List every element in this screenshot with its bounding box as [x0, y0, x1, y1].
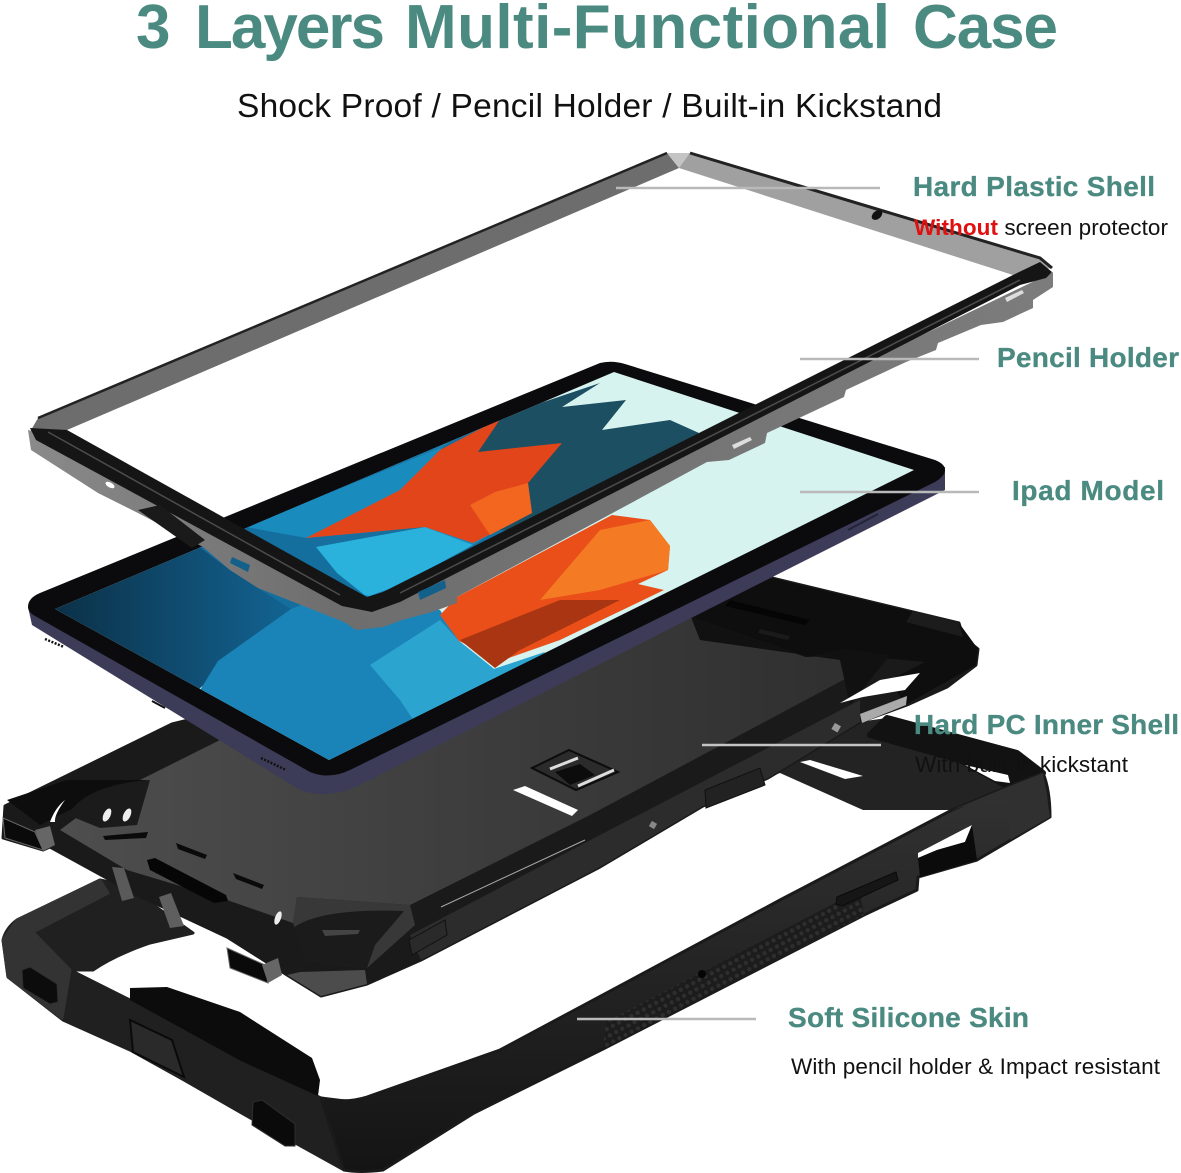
shell gray strip [860, 696, 907, 723]
shell rim strip [410, 700, 860, 960]
silicone strap behind crescent [918, 825, 977, 877]
shell upper dark slot [725, 600, 810, 625]
label: hard plastic shell: Hard Plastic Shell [913, 171, 1155, 202]
leader line: ipad model [800, 491, 979, 493]
silicone right corner highlight [952, 773, 1050, 840]
wallpaper mint background [55, 372, 914, 760]
frame strip highlight left [48, 432, 340, 595]
shell right lobe [293, 911, 404, 968]
wallpaper bright lower blue [370, 620, 545, 730]
shell lower right lobe area [293, 897, 415, 968]
leader line: pencil holder [800, 358, 979, 360]
shell small slot two [233, 873, 264, 889]
frame strip highlight [400, 280, 1020, 593]
shell outer rim [3, 578, 978, 996]
note: without screen protector: Without screen protector [914, 215, 1168, 240]
shell upper right pen clip [906, 611, 963, 637]
shell port tab bottom [227, 948, 268, 983]
frame white clip one [732, 437, 752, 449]
frame camera hole [870, 208, 884, 222]
shell slit in right lobe [322, 930, 360, 936]
label: hard PC inner shell: Hard PC Inner Shell [914, 709, 1179, 740]
silicone white notch [965, 765, 1010, 783]
subtitle: Shock Proof / Pencil Holder / Built-in Kickstand [237, 88, 942, 125]
wallpaper orange top petal [306, 418, 562, 543]
shell upper right black strip [691, 578, 978, 705]
shell gray clip left [35, 826, 55, 851]
silicone side button [836, 872, 898, 906]
shell small lug [831, 723, 841, 732]
shell gray corner [287, 970, 367, 996]
leader line: hard PC inner shell [702, 744, 881, 746]
tablet side edge [28, 467, 945, 794]
silicone black rear tab [130, 987, 320, 1096]
shell white lens cutout [840, 673, 920, 703]
tablet speaker grille right [261, 758, 286, 770]
label: ipad model: Ipad Model [1012, 475, 1164, 506]
shell dark kickstand square [555, 764, 595, 785]
wallpaper orange lower petal [440, 515, 670, 661]
frame white clip two [1005, 290, 1024, 302]
wallpaper top blue [248, 448, 490, 545]
shell gray clip bottom [262, 958, 282, 983]
tablet screen wallpaper [55, 372, 914, 760]
wallpaper blue middle [200, 528, 290, 608]
wallpaper base blue behind frame [245, 416, 508, 610]
frame top right band [667, 153, 1052, 275]
silicone hex grip texture [603, 890, 864, 1049]
wallpaper lower blue [200, 594, 545, 760]
frame blue clip one [230, 557, 250, 572]
wallpaper dark teal mountains [470, 383, 699, 530]
panel: tablet [28, 362, 945, 794]
wallpaper orange highlight top [470, 483, 532, 535]
leader line: soft silicone skin [577, 1018, 756, 1020]
shell kickstand mount [532, 750, 618, 790]
silicone white slot [800, 760, 863, 779]
panel: hard plastic shell frame [28, 153, 1053, 630]
shell white slot [513, 786, 578, 816]
shell kickstand white frame [550, 758, 614, 786]
wallpaper bright blue [316, 527, 473, 597]
shell small lug two [649, 821, 657, 829]
shell white oval two [121, 807, 133, 823]
frame top left band [30, 153, 679, 432]
silicone white crescent [918, 825, 972, 858]
shell left lobe [68, 780, 150, 828]
shell upper small slot [758, 629, 790, 640]
silicone port opening bottom [252, 1100, 295, 1146]
leader line: hard plastic shell [616, 187, 880, 189]
frame black inner strip [30, 262, 1052, 612]
frame top outer dark edge right [690, 153, 1052, 268]
tablet side button [152, 701, 165, 708]
tablet volume key [848, 514, 878, 530]
shell recess button [705, 768, 765, 808]
shell white oval one [101, 807, 113, 823]
frame small clip [104, 480, 116, 490]
frame apex highlight [667, 153, 690, 168]
label: pencil holder: Pencil Holder [997, 342, 1179, 373]
note: with pencil holder and impact resistant: With pencil holder & Impact resistant [791, 1054, 1161, 1079]
frame top outer dark edge left [38, 153, 667, 418]
note: with built-in kickstant: With built-in kickstant [915, 752, 1129, 777]
shell white crescent left [50, 800, 65, 822]
shell white oval lower [273, 910, 283, 926]
label: soft silicone skin: Soft Silicone Skin [788, 1002, 1029, 1033]
panel: soft silicone skin layer [3, 718, 1050, 1172]
silicone top rim [870, 718, 1043, 785]
silicone left corner rim [3, 880, 108, 1018]
shell inner panel [60, 610, 890, 923]
shell ridge highlight [441, 840, 585, 907]
shell upper panel piece [691, 617, 890, 705]
silicone back panel behind the shell [700, 718, 1043, 810]
silicone port opening left [22, 967, 58, 1004]
shell port tab left [3, 818, 43, 850]
silicone hole [698, 970, 706, 978]
wallpaper orange lower highlight [540, 520, 670, 600]
wallpaper red shadow [460, 600, 620, 668]
shell side slot [409, 920, 447, 955]
silicone left and bottom band [3, 880, 345, 1170]
shell hanging clip one [112, 867, 134, 901]
silicone long right band [321, 773, 1050, 1172]
wallpaper navy left [55, 441, 450, 688]
tablet speaker grille left [45, 639, 64, 647]
tablet bezel [28, 362, 945, 776]
shell thin slot [103, 832, 148, 840]
panel: hard PC inner shell layer [3, 578, 978, 996]
shell top left rim interior [7, 780, 147, 825]
shell hanging clip two [159, 893, 184, 928]
frame dark pen slot [138, 505, 205, 548]
shell long slot [147, 858, 228, 903]
frame blue clip two [418, 580, 446, 600]
frame lower gray side [28, 272, 1053, 630]
shell small slot one [176, 843, 207, 859]
silicone slider [130, 1020, 184, 1077]
